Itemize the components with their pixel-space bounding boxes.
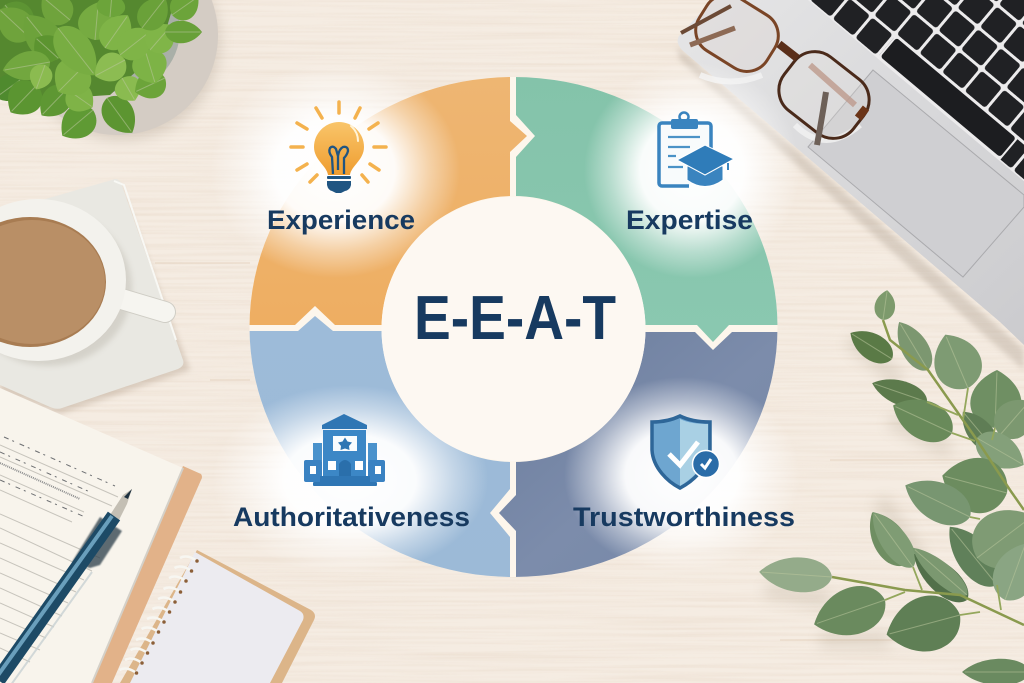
icon: institution building: [304, 414, 385, 486]
quadrant: Experience (orange): [240, 70, 527, 325]
pen: [0, 489, 132, 683]
white glows behind icons: [210, 62, 800, 575]
small spiral notepad: [120, 550, 315, 683]
icon: shield with check: [652, 416, 720, 488]
label: Expertise: Expertise: [626, 205, 753, 235]
icon: clipboard with graduation cap: [659, 112, 734, 186]
laptop: [677, 0, 1024, 370]
center circle: [382, 197, 646, 461]
quadrant: Expertise (green): [516, 70, 790, 342]
icon: light bulb: [291, 102, 386, 193]
cycle diagram: four quadrants: [240, 70, 790, 590]
quadrant: Trustworthiness (slate): [499, 332, 790, 590]
plant in pot: [0, 0, 220, 148]
label: Authoritativeness: Authoritativeness: [233, 502, 470, 532]
trackpad: [808, 70, 1024, 277]
keyboard keys: [808, 0, 1024, 181]
coffee cup on saucer: [0, 179, 190, 414]
eucalyptus branches: [758, 289, 1024, 683]
open notebook with wooden cover: [0, 388, 202, 683]
title: E-E-A-T: E-E-A-T: [414, 284, 616, 353]
glasses: [681, 0, 880, 149]
quadrant: Authoritativeness (blue): [240, 316, 510, 590]
label: Trustworthiness: Trustworthiness: [573, 502, 795, 532]
label: Experience: Experience: [267, 205, 415, 235]
